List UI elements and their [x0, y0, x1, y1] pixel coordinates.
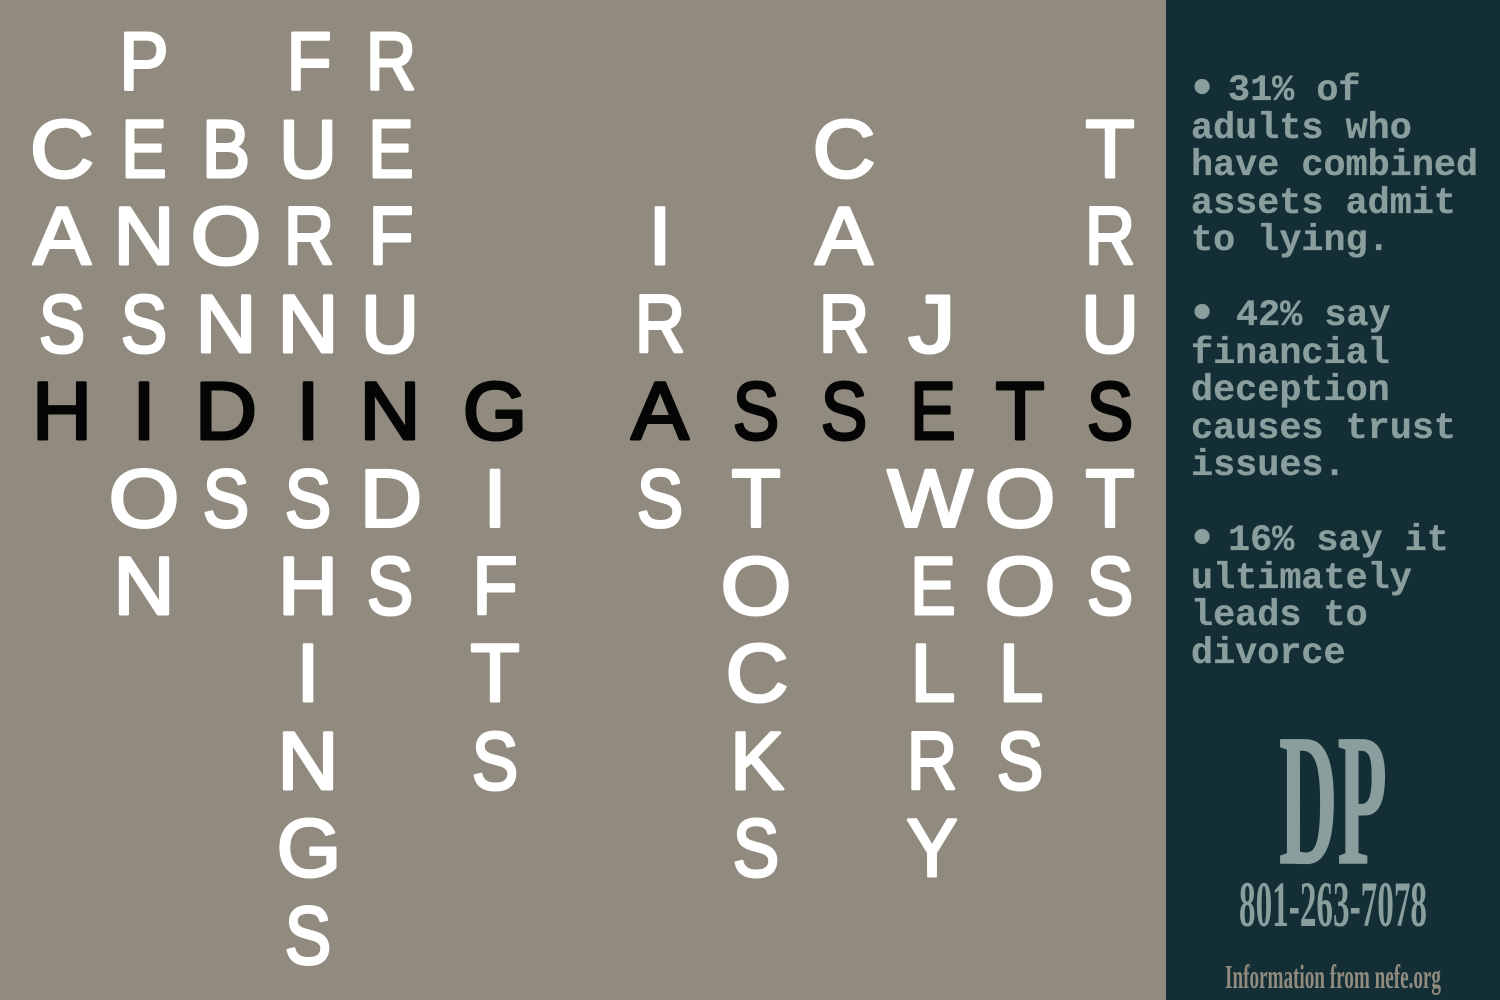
title: HIDING ASSETS: I: [133, 366, 155, 457]
statistic: 42%: causes trust: [1191, 408, 1456, 450]
word: TRUSTS: T: [1085, 454, 1135, 545]
word: GIFTS: [470, 454, 520, 807]
word: PENSION: N: [114, 190, 174, 282]
word: TOOLS: O: [985, 454, 1055, 544]
word: FURNISHINGS: H: [278, 540, 338, 632]
word: REFUNDS: F: [368, 189, 414, 282]
word: FURNISHINGS: N: [278, 278, 338, 370]
word: CARS: C: [813, 103, 875, 194]
statistic: 31%: adults who: [1191, 108, 1412, 150]
title: HIDING ASSETS: S: [821, 366, 867, 457]
title: HIDING ASSETS: S: [1087, 366, 1133, 457]
title: HIDING ASSETS: I: [297, 366, 319, 457]
word: TRUSTS: U: [1081, 279, 1139, 370]
word: STOCKS: C: [726, 627, 788, 718]
title: HIDING ASSETS: [32, 365, 1133, 457]
statistic: 16%: leads to: [1191, 595, 1368, 637]
statistic: 16%: •: [1186, 511, 1218, 570]
statistic: 31%: 31% of: [1228, 70, 1360, 112]
statistic: 31%: have combined: [1191, 145, 1478, 187]
word: JEWELRY: W: [887, 453, 973, 545]
word: REFUNDS: D: [360, 452, 422, 544]
word: CASH: [30, 104, 94, 370]
word: CARS: A: [815, 190, 873, 282]
word: GIFTS: S: [472, 716, 518, 807]
word: PENSION: P: [119, 15, 169, 107]
word: FURNISHINGS: S: [285, 453, 331, 545]
word: STOCKS: K: [730, 716, 784, 807]
statistic: 42%: financial: [1191, 333, 1390, 375]
statistic: 42%: issues.: [1191, 445, 1346, 487]
word: GIFTS: F: [472, 539, 518, 632]
word: TOOLS: L: [999, 628, 1043, 719]
word: JEWELRY: Y: [907, 801, 957, 894]
word: PENSION: E: [121, 103, 167, 194]
word: TRUSTS: S: [1087, 541, 1133, 632]
statistic: 42%: deception: [1191, 370, 1390, 412]
statistic: 31%: to lying.: [1191, 220, 1390, 262]
word: REFUNDS: S: [367, 541, 413, 632]
word: CARS: R: [819, 279, 869, 370]
word: IRAS: I: [649, 191, 671, 282]
word: JEWELRY: L: [911, 628, 955, 719]
word: IRAS: R: [635, 279, 685, 370]
statistic: 31%: •: [1186, 61, 1218, 120]
title: HIDING ASSETS: H: [32, 365, 92, 457]
title: HIDING ASSETS: N: [360, 365, 420, 457]
word: FURNISHINGS: I: [297, 628, 319, 719]
word: FURNISHINGS: S: [285, 890, 331, 982]
word: CASH: C: [30, 104, 94, 195]
word: TOOLS: O: [985, 541, 1055, 632]
word: FURNISHINGS: G: [277, 802, 341, 894]
title: HIDING ASSETS: G: [463, 365, 527, 457]
word: TRUSTS: [1081, 104, 1139, 632]
word: FURNISHINGS: R: [284, 191, 334, 282]
word: IRAS: S: [637, 453, 683, 545]
word: PENSION: O: [109, 454, 179, 544]
word: TRUSTS: R: [1085, 191, 1135, 282]
word: FURNISHINGS: U: [279, 104, 337, 195]
word: TOOLS: [985, 454, 1055, 807]
word: JEWELRY: R: [907, 716, 957, 807]
word: CASH: A: [33, 190, 91, 282]
statistic: 42%: •: [1186, 286, 1218, 345]
statistic: 16%: ultimately: [1191, 558, 1412, 600]
word: PENSION: [109, 15, 179, 632]
statistic: 16%: divorce: [1191, 633, 1346, 675]
word: TRUSTS: T: [1085, 104, 1135, 195]
word: GIFTS: T: [470, 628, 520, 719]
title: HIDING ASSETS: S: [733, 366, 779, 457]
word: TOOLS: S: [997, 716, 1043, 807]
statistic: 16%: 16% say it: [1228, 520, 1449, 562]
statistic: 31%: [1186, 61, 1478, 262]
word: REFUNDS: E: [368, 103, 414, 194]
word: FURNISHINGS: [277, 15, 341, 982]
word: STOCKS: O: [721, 541, 791, 632]
title: HIDING ASSETS: E: [910, 365, 956, 456]
word: REFUNDS: U: [361, 279, 419, 370]
word: STOCKS: [721, 454, 791, 894]
word: FURNISHINGS: N: [278, 715, 338, 807]
word: BONDS: S: [203, 453, 249, 545]
word: IRAS: [635, 191, 685, 545]
word: STOCKS: S: [733, 803, 779, 894]
word: BONDS: [191, 104, 261, 545]
word: BONDS: N: [196, 278, 256, 370]
word: JEWELRY: J: [908, 278, 956, 370]
word: PENSION: N: [114, 540, 174, 632]
statistic: 31%: assets admit: [1191, 183, 1456, 225]
word: CASH: S: [39, 279, 85, 370]
title: HIDING ASSETS: A: [631, 365, 689, 457]
word: CARS: [813, 103, 875, 370]
statistic: 16%: [1186, 511, 1449, 675]
word: STOCKS: T: [731, 454, 781, 545]
statistic: 42%: 42% say: [1236, 295, 1391, 337]
word: REFUNDS: [360, 16, 422, 632]
statistic: 42%: [1186, 286, 1456, 487]
word: FURNISHINGS: F: [286, 15, 332, 107]
word: JEWELRY: [887, 278, 973, 894]
word: REFUNDS: R: [366, 16, 416, 108]
sidebar panel: [1166, 0, 1500, 1000]
word: JEWELRY: E: [910, 540, 956, 631]
title: HIDING ASSETS: D: [195, 365, 257, 457]
word: BONDS: O: [191, 191, 261, 282]
title: HIDING ASSETS: T: [995, 366, 1045, 457]
word: PENSION: S: [121, 279, 167, 370]
word: BONDS: B: [202, 104, 250, 195]
word: GIFTS: I: [484, 454, 506, 544]
